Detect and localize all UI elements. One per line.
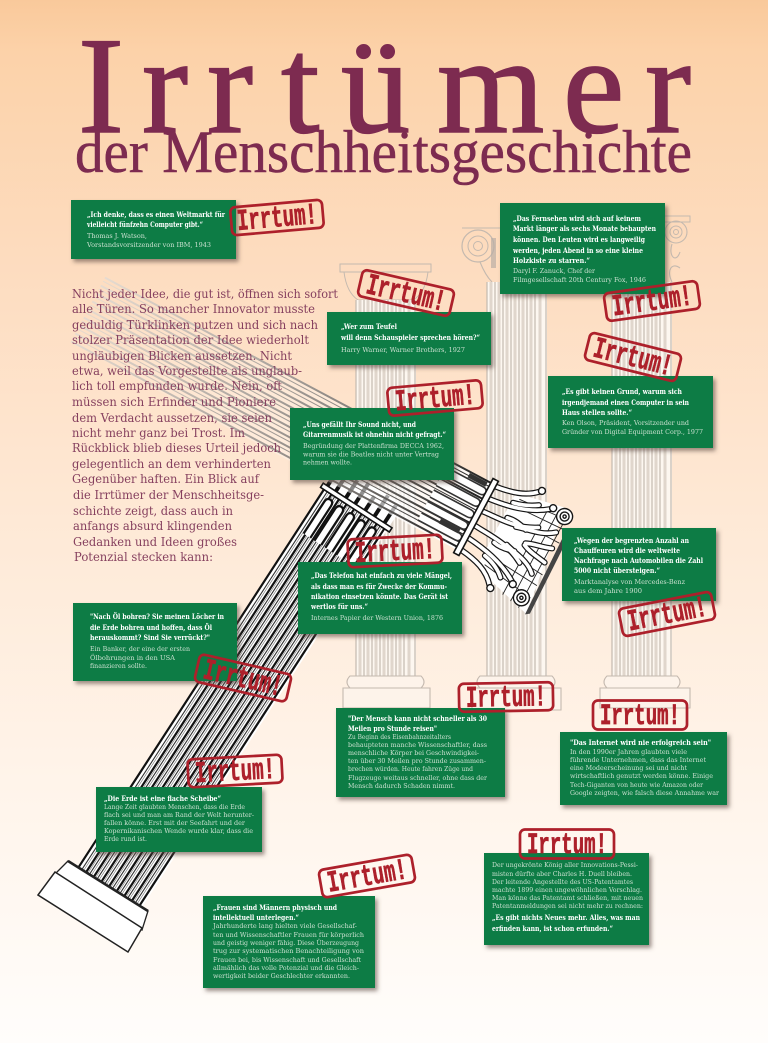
panel: oil quote: die Erde bohren und hoffen, dass Öl [90, 623, 212, 632]
stamp: speed: Irrtum! [466, 681, 546, 717]
panel: speed quote: ten über 30 Meilen pro Stunde zusammen- [348, 757, 486, 765]
intro text: schichte zeigt, dass auch in [73, 504, 233, 518]
panel: Olson quote [548, 376, 713, 448]
panel: Olson quote: irgendjemand einen Computer in sein [562, 398, 690, 407]
panel: flat earth quote [96, 787, 262, 852]
panel: Duell quote: Der ungekrönte König aller Innovations-Pessi- [492, 861, 638, 869]
panel: internet quote: "Das Internet wird nie erfolgreich sein" [570, 738, 711, 747]
panel: internet quote: Google zeigten, wie falsch diese Annahme war [570, 789, 720, 797]
panel: internet quote: Tech-Giganten von heute wie Amazon oder [570, 781, 704, 789]
panel: women quote [203, 896, 375, 988]
panel: DECCA quote [290, 408, 454, 480]
panel: DECCA quote: warum sie die Beatles nicht unter Vertrag [303, 450, 440, 458]
stamp: women: Irrtum! [325, 854, 410, 902]
stamp: speed [459, 681, 553, 717]
panel: flat earth quote: Kopernikanischen Wende wurde klar, dass die [104, 827, 253, 835]
panel: women quote: Frauen bei, bis Wissenschaft und Gesellschaft [213, 956, 361, 964]
stamp: Watson: Irrtum! [236, 199, 319, 240]
standing column centre [462, 228, 561, 710]
panel: speed quote: behaupteten manche Wissenschaftler, dass [348, 741, 487, 749]
panel: Duell quote: Man könne das Patentamt schließen, mit neuen [492, 894, 644, 902]
panel: Zanuck quote: werden, jeden Abend in so eine kleine [512, 246, 643, 255]
panel: Zanuck quote: „Das Fernsehen wird sich auf keinem [513, 214, 641, 223]
panel: women quote: und geistig weniger fähig. Diese Überzeugung [213, 938, 360, 947]
stamp: Mercedes: Irrtum! [625, 592, 710, 640]
intro text: Nicht jeder Idee, die gut ist, öffnen sich sofort [72, 287, 338, 301]
panel: Watson quote: Thomas J. Watson, [87, 232, 147, 240]
stamp: Olson: Irrtum! [590, 333, 675, 385]
stamp: women [318, 853, 417, 903]
panel: women quote: trug zur systematischen Benachteiligung von [213, 947, 365, 955]
panel: oil quote: Ein Banker, der eine der ersten [90, 645, 191, 653]
panel: oil quote: Ölbohrungen in den USA [90, 653, 175, 662]
panel: speed quote: brechen würden. Heute fahren Züge und [348, 765, 474, 773]
stamp: Western Union [347, 534, 443, 572]
intro text: Gegenüber haften. Ein Blick auf [72, 472, 261, 486]
panel: women quote: Jahrhunderte lang hielten viele Gesellschaf- [212, 922, 357, 930]
panel: Mercedes quote: 5000 nicht übersteigen.“ [574, 566, 660, 575]
stamp: Zanuck: Irrtum! [610, 281, 694, 325]
panel: internet quote [560, 732, 727, 805]
panel: Duell quote: „Es gibt nichts Neues mehr. Alles, was man [492, 913, 641, 922]
intro text: Gedanken und Ideen großes [73, 535, 237, 549]
panel: flat earth quote: „Die Erde ist eine flache Scheibe“ [104, 794, 221, 803]
stamp: Duell [520, 829, 614, 863]
panel: Mercedes quote: Chauffeuren wird die weltweite [574, 546, 680, 555]
intro text: gelegentlich an dem verhinderten [72, 457, 271, 471]
panel: Duell quote: Patentanmeldungen sei nicht mehr zu rechnen: [492, 902, 643, 910]
panel: Western Union quote: wertlos für uns.“ [310, 602, 368, 611]
panel: Western Union quote: als dass man es für Zwecke der Kommu- [311, 582, 447, 591]
panel: Western Union quote: „Das Telefon hat einfach zu viele Mängel, [311, 571, 452, 580]
stamp: Duell: Irrtum! [527, 829, 607, 863]
stamp: internet: Irrtum! [600, 700, 680, 734]
panel: speed quote: Meilen pro Stunde reisen" [348, 724, 437, 733]
panel: Watson quote: „Ich denke, dass es einen Weltmarkt für [87, 210, 225, 219]
panel: Watson quote: Vorstandsvorsitzender von IBM, 1943 [86, 241, 211, 249]
panel: Western Union quote: Internes Papier der Western Union, 1876 [311, 614, 443, 622]
intro text [72, 287, 338, 564]
panel: Warner quote [327, 312, 491, 365]
panel: speed quote: menschliche Körper bei Geschwindigkei- [348, 749, 479, 757]
panel: women quote: intellektuell unterlegen.“ [213, 913, 299, 922]
stamp: Watson [230, 199, 324, 240]
panel: internet quote: führende Unternehmen, dass das Internet [570, 756, 706, 764]
intro text: die Irrtümer der Menschheitsge- [73, 488, 264, 502]
panel: internet quote: In den 1990er Jahren glaubten viele [570, 748, 687, 756]
intro text: alle Türen. So mancher Innovator musste [72, 302, 315, 316]
panel: Mercedes quote: Nachfrage nach Automobilen die Zahl [574, 556, 703, 565]
stamp: DECCA [387, 379, 483, 421]
panel: Duell quote: misten dürfte aber Charles H. Duell bleiben. [492, 870, 632, 878]
panel: speed quote: "Der Mensch kann nicht schneller als 30 [348, 714, 487, 723]
panel: Mercedes quote [562, 528, 716, 601]
intro text: dem Verdacht aussetzen, sie seien [72, 411, 272, 425]
fallen column: lower shaft and base [38, 462, 406, 952]
panel: Duell quote: erfinden kann, ist schon erfunden.“ [492, 924, 613, 933]
stamp: Warner [356, 268, 455, 322]
stamp: Mercedes [618, 590, 717, 642]
panel: flat earth quote: Erde rund ist. [104, 835, 147, 843]
panel: oil quote: "Nach Öl bohren? Sie meinen Löcher in [90, 612, 225, 621]
panel: Olson quote: „Es gibt keinen Grund, warum sich [562, 387, 683, 396]
panel: speed quote: Zu Beginn des Eisenbahnzeitalters [348, 733, 451, 741]
panel: oil quote: finanzieren sollte. [90, 662, 147, 670]
panel: Watson quote: vielleicht fünfzehn Computer gibt.“ [86, 220, 203, 229]
panel: Western Union quote: nikation einsetzen könnte. Das Gerät ist [311, 592, 448, 601]
intro text: Rückblick blieb dieses Urteil jedoch [72, 441, 281, 455]
intro text: lich toll empfunden wurde. Nein, oft [72, 379, 282, 393]
intro text: etwa, weil das Vorgestellte als unglaub- [72, 364, 302, 378]
intro text: geduldig Türklinken putzen und sich nach [72, 318, 318, 332]
panel: Duell quote: Der leitende Angestellte des US-Patentamtes [492, 878, 633, 886]
subtitle: der Menschheitsgeschichte [75, 119, 692, 185]
panel: Zanuck quote: Markt länger als sechs Monate behaupten [513, 224, 657, 233]
stamp: oil [193, 653, 292, 707]
panel: oil quote: herauskommt? Sind Sie verrückt?" [90, 633, 210, 642]
panel: Olson quote: Gründer von Digital Equipment Corp., 1977 [562, 428, 703, 436]
panel: women quote: „Frauen sind Männern physisch und [213, 903, 337, 912]
panel: women quote: ten und Wissenschaftler Frauen für körperlich [213, 931, 365, 939]
panel: Warner quote: „Wer zum Teufel [341, 322, 397, 331]
intro text: anfangs absurd klingenden [73, 519, 232, 533]
panel: Olson quote: Haus stellen sollte.“ [562, 408, 632, 417]
intro text: stolzer Präsentation der Idee wiederholt [72, 333, 309, 347]
panel: Mercedes quote: Marktanalyse von Mercedes-Benz [574, 578, 685, 586]
panel: Mercedes quote: aus dem Jahre 1900 [574, 587, 642, 595]
standing column left [340, 264, 431, 708]
panel: Zanuck quote: Holzkiste zu starren.“ [513, 256, 590, 265]
panel: speed quote: Mensch dadurch Schaden nimmt. [348, 782, 455, 790]
panel: Duell quote [484, 853, 649, 945]
panel: flat earth quote: fallen könne. Erst mit der Seefahrt und der [104, 819, 246, 827]
stamp: Olson [583, 331, 682, 387]
panel: Duell quote: machte 1899 einen ungewöhnlichen Vorschlag. [492, 886, 642, 894]
panel: flat earth quote: flach sei und man am Rand der Welt herunter- [104, 811, 254, 819]
stamp: Western Union: Irrtum! [354, 534, 436, 572]
stamp: flat earth: Irrtum! [194, 754, 276, 792]
intro text: müssen sich Erfinder und Pioniere [72, 395, 276, 409]
panel: internet quote: wirtschaftlich genutzt werden könne. Einige [570, 772, 713, 780]
panel: internet quote: eine Modeerscheinung sei und nicht [570, 764, 687, 772]
panel: DECCA quote: Gitarrenmusik ist ohnehin nicht gefragt.“ [303, 430, 446, 439]
panel: Zanuck quote: Filmgesellschaft 20th Century Fox, 1946 [513, 276, 646, 284]
panel: women quote: allmählich das volle Potenzial und die Gleich- [213, 964, 359, 972]
panel: DECCA quote: „Uns gefällt Ihr Sound nicht, und [303, 420, 416, 429]
standing column right [600, 216, 690, 708]
panel: Zanuck quote: Daryl F. Zanuck, Chef der [513, 267, 596, 275]
intro text: nicht mehr ganz bei Trost. Im [72, 426, 245, 440]
intro text: Potenzial stecken kann: [74, 550, 213, 564]
panel: Warner quote: will denn Schauspieler sprechen hören?“ [340, 333, 480, 342]
panel: DECCA quote: nehmen wollte. [303, 458, 352, 466]
intro text: ungläubigen Blicken aussetzen. Nicht [72, 349, 292, 363]
panel: Mercedes quote: „Wegen der begrenzten Anzahl an [574, 536, 690, 545]
stamp: internet [593, 700, 687, 734]
stamp: flat earth [187, 754, 283, 792]
stamp: Zanuck [603, 280, 701, 326]
panel: speed quote [336, 708, 505, 797]
panel: oil quote [73, 603, 237, 681]
title: Irrtümer [78, 9, 691, 162]
panel: Watson quote [71, 200, 236, 259]
stamp: Warner: Irrtum! [363, 269, 448, 321]
panel: Olson quote: Ken Olson, Präsident, Vorsitzender und [562, 419, 690, 427]
panel: DECCA quote: Begründung der Plattenfirma DECCA 1962, [303, 442, 444, 450]
panel: Western Union quote [298, 562, 462, 634]
fallen column: upper shaft and capital [58, 260, 585, 616]
panel: women quote: wertigkeit beider Geschlechter erkannten. [213, 972, 350, 980]
panel: Zanuck quote: können. Den Leuten wird es langweilig [513, 235, 645, 244]
panel: Zanuck quote [500, 203, 665, 294]
panel: Warner quote: Harry Warner, Warner Brothers, 1927 [341, 346, 465, 354]
stamp: oil: Irrtum! [200, 654, 285, 706]
stamp: DECCA: Irrtum! [394, 380, 477, 420]
panel: speed quote: Flugzeuge weitaus schneller, ohne dass der [348, 774, 488, 782]
panel: flat earth quote: Lange Zeit glaubten Menschen, dass die Erde [104, 803, 245, 811]
